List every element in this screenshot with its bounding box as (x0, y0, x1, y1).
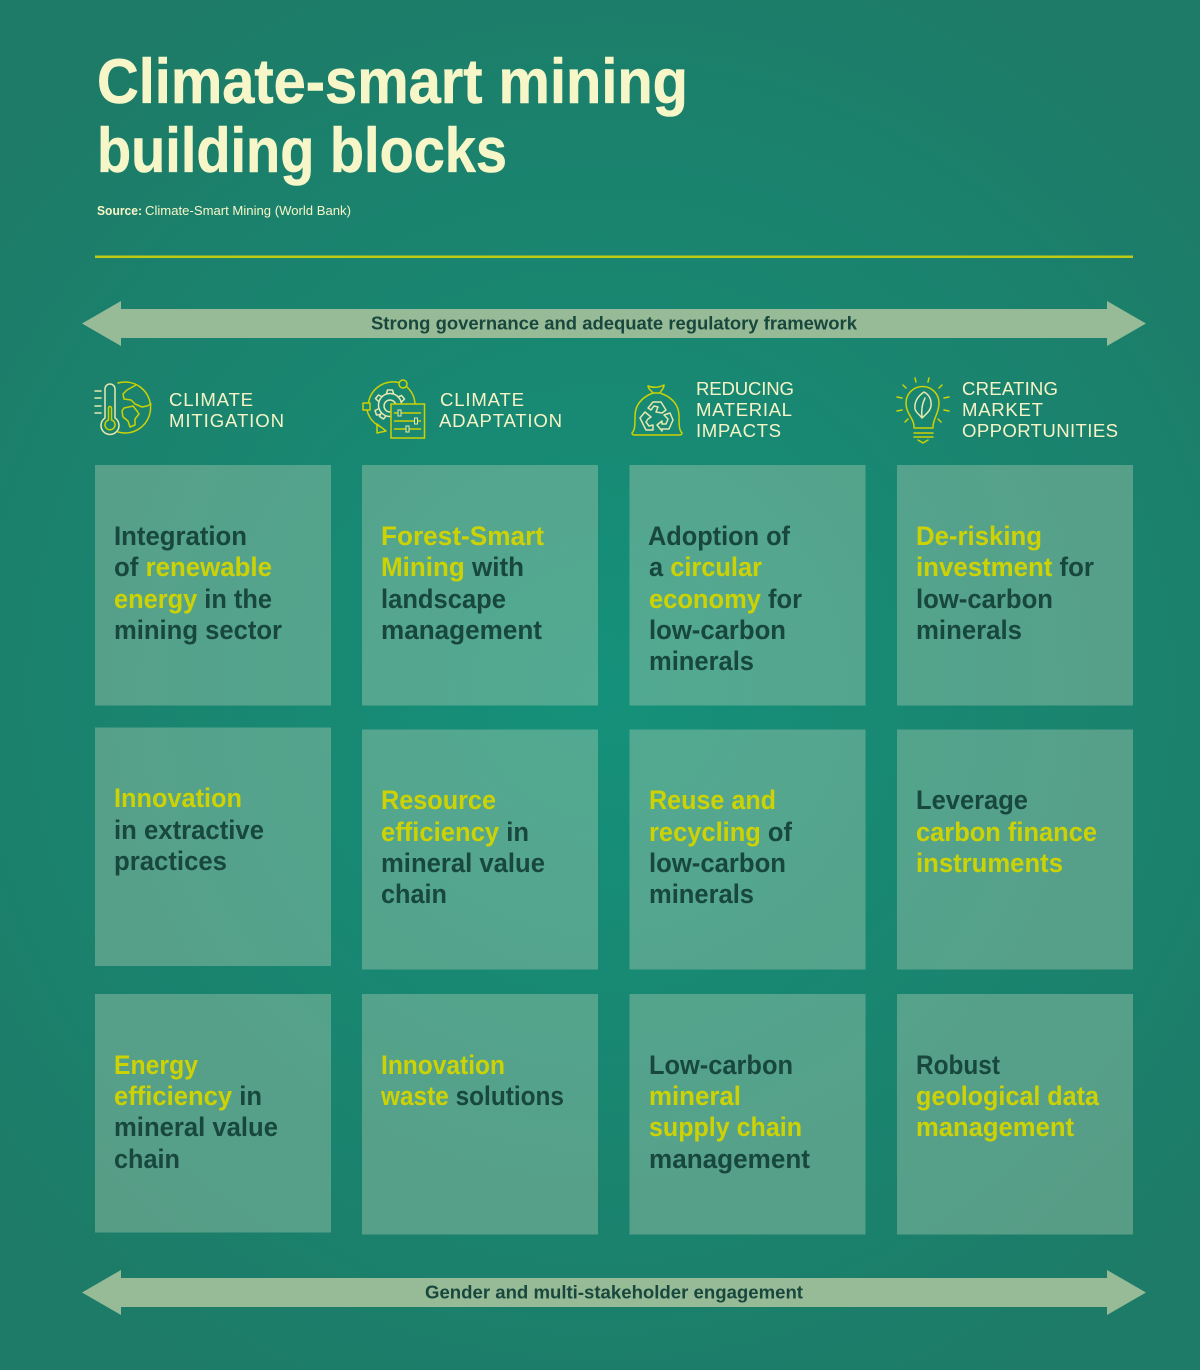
column header: climate adaptation: CLIMATE (440, 389, 524, 410)
panel: circular economy: economy for (649, 584, 802, 614)
panel: resource efficiency: Resource (381, 785, 496, 815)
panel: innovation waste solutions: Innovation (381, 1050, 505, 1080)
panel: carbon finance (897, 730, 1133, 970)
panel: geological data: Robust (916, 1050, 1000, 1080)
column header: reducing material impacts: REDUCING (696, 378, 794, 399)
panel: low-carbon supply chain: supply chain (649, 1112, 802, 1142)
icon: light bulb with leaf (897, 378, 949, 443)
panel: reuse and recycling: recycling of (649, 817, 793, 847)
panel: low-carbon supply chain: mineral (649, 1081, 741, 1111)
icon: gear and sliders panel (363, 380, 424, 438)
panel: renewable energy integration: Integration (114, 521, 247, 551)
panel: renewable energy integration: mining sector (114, 615, 282, 645)
panel: circular economy: a circular (649, 552, 762, 582)
panel: resource efficiency: efficiency in (381, 817, 529, 847)
panel: geological data: management (916, 1112, 1074, 1142)
panel: energy efficiency: mineral value (114, 1112, 278, 1142)
column header: creating market opportunities (897, 378, 1118, 443)
title: building blocks (97, 116, 507, 186)
panel: innovation in extractive practices: in extractive (114, 815, 264, 845)
panel: circular economy: Adoption of (648, 521, 791, 551)
column header: climate adaptation: ADAPTATION (439, 410, 562, 431)
panel: de-risking investment: low-carbon (916, 584, 1053, 614)
panel: geological data (897, 994, 1133, 1234)
panel: energy efficiency: chain (114, 1144, 180, 1174)
panel: de-risking investment: De-risking (916, 521, 1042, 551)
panel: innovation in extractive practices: Innovation (114, 783, 242, 813)
panel: energy efficiency: Energy (114, 1050, 198, 1080)
panel: circular economy (630, 465, 866, 706)
column header: climate mitigation (95, 382, 284, 434)
panel: renewable energy integration: energy in the (114, 584, 272, 614)
panel: carbon finance: carbon finance (916, 817, 1097, 847)
column header: creating market opportunities: OPPORTUNITIES (962, 420, 1118, 441)
arrow: governance: Strong governance and adequate regulatory framework (371, 314, 858, 334)
panel: forest-smart mining: Mining with (381, 552, 524, 582)
panel: forest-smart mining: management (381, 615, 542, 645)
column header: reducing material impacts: IMPACTS (696, 420, 781, 441)
arrow: gender engagement (82, 1270, 1146, 1315)
panel: energy efficiency (95, 994, 331, 1232)
column header: climate adaptation (363, 380, 562, 438)
panel: renewable energy integration (95, 465, 331, 706)
panel: de-risking investment (897, 465, 1133, 706)
arrow: governance (82, 301, 1146, 346)
column header: creating market opportunities: MARKET (962, 399, 1043, 420)
panel: renewable energy integration: of renewable (114, 552, 272, 582)
source note: Climate-Smart Mining (World Bank) (145, 204, 351, 218)
panel: forest-smart mining: Forest-Smart (381, 521, 544, 551)
panel: resource efficiency: chain (381, 879, 447, 909)
panel: forest-smart mining: landscape (381, 584, 506, 614)
panel: low-carbon supply chain (630, 994, 866, 1234)
panel: reuse and recycling (630, 730, 866, 970)
panel: resource efficiency (362, 730, 598, 970)
panel: innovation in extractive practices: practices (114, 846, 227, 876)
panel: resource efficiency: mineral value (381, 848, 545, 878)
panel: de-risking investment: investment for (916, 552, 1094, 582)
panel: reuse and recycling: low-carbon (649, 848, 786, 878)
arrow: gender engagement: Gender and multi-stakeholder engagement (425, 1282, 803, 1302)
column header: reducing material impacts: MATERIAL (696, 399, 792, 420)
panel: low-carbon supply chain: Low-carbon (649, 1050, 793, 1080)
title (97, 47, 688, 186)
icon: recycling bag (632, 385, 682, 435)
panel: carbon finance: instruments (916, 848, 1063, 878)
column header: climate mitigation: CLIMATE (169, 389, 253, 410)
column header: creating market opportunities: CREATING (962, 378, 1058, 399)
column header: climate mitigation: MITIGATION (169, 410, 284, 431)
panel: circular economy: low-carbon (649, 615, 786, 645)
title: Climate-smart mining (97, 47, 688, 117)
icon: thermometer and globe (95, 382, 151, 434)
panel: low-carbon supply chain: management (649, 1144, 810, 1174)
panel: innovation in extractive practices (95, 728, 331, 966)
panel: forest-smart mining (362, 465, 598, 706)
panel: reuse and recycling: Reuse and (649, 785, 776, 815)
panel: geological data: geological data (916, 1081, 1100, 1111)
panel: carbon finance: Leverage (916, 785, 1028, 815)
panel: reuse and recycling: minerals (649, 879, 754, 909)
source note: Source: (97, 204, 142, 218)
panel: innovation waste solutions (362, 994, 598, 1234)
panel: circular economy: minerals (649, 646, 754, 676)
panel: innovation waste solutions: waste solutions (380, 1081, 564, 1111)
panel: energy efficiency: efficiency in (114, 1081, 262, 1111)
column header: reducing material impacts (632, 378, 794, 441)
panel: de-risking investment: minerals (916, 615, 1022, 645)
